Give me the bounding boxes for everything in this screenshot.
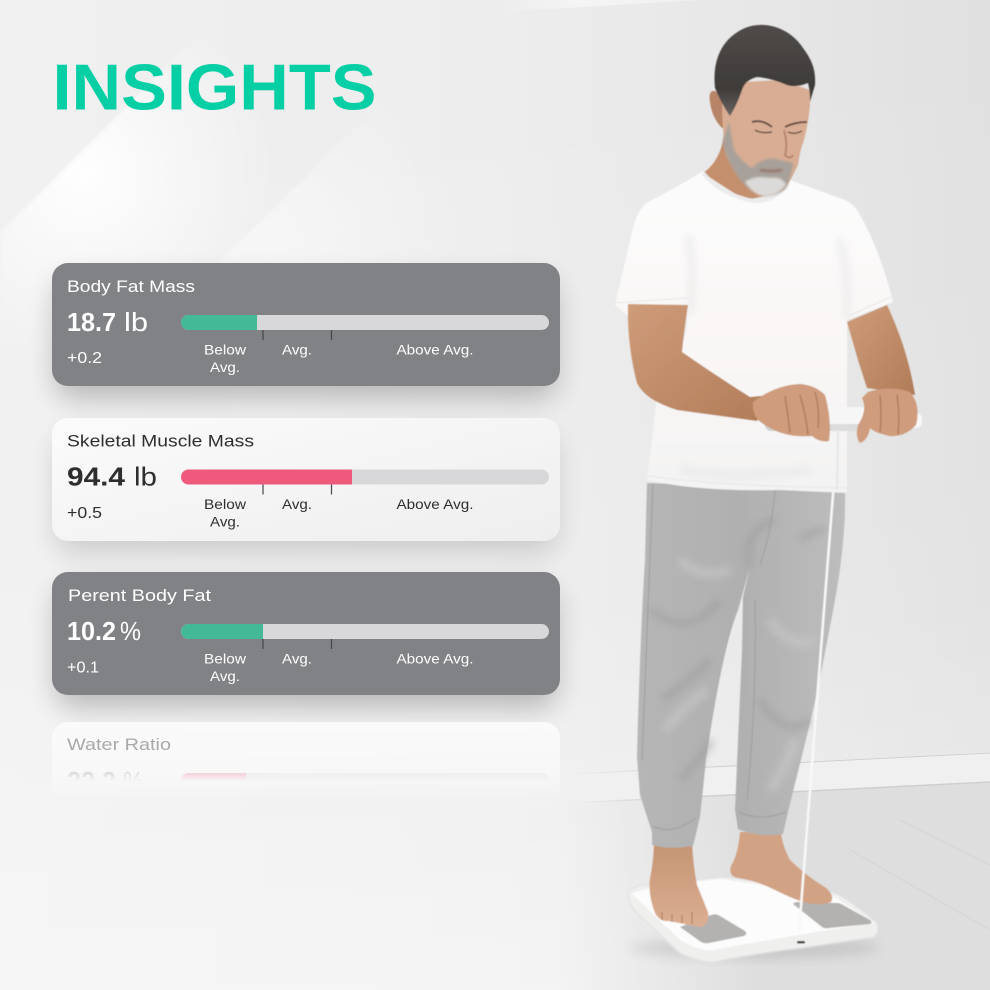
trousers — [637, 483, 845, 848]
panel: body fat mass: Avg. — [210, 360, 240, 375]
panel: percent body fat: % — [120, 616, 141, 646]
panel: skeletal muscle mass — [52, 418, 560, 553]
panel: skeletal muscle mass: Skeletal Muscle Mass — [67, 432, 254, 450]
panel: percent body fat: Avg. — [210, 669, 240, 684]
arm: viewer's right — [847, 305, 915, 395]
neck — [703, 135, 792, 200]
panel: percent body fat — [52, 572, 560, 707]
panel: water ratio (fading out): % — [123, 766, 144, 796]
panel: skeletal muscle mass: Avg. — [282, 497, 312, 512]
t-shirt — [615, 171, 893, 493]
hair — [714, 25, 815, 116]
panel: skeletal muscle mass: Above Avg. — [396, 497, 474, 512]
photo: man standing on a smart scale — [615, 25, 922, 962]
title: INSIGHTS — [52, 50, 376, 124]
panel: skeletal muscle mass: Avg. — [210, 514, 240, 530]
panel: water ratio (fading out): 22.2 — [67, 766, 116, 796]
panel: body fat mass: Body Fat Mass — [67, 278, 195, 296]
panel: body fat mass: Above Avg. — [396, 342, 474, 358]
face — [722, 80, 810, 195]
panel: percent body fat: Perent Body Fat — [68, 587, 211, 605]
panel: percent body fat: Below — [204, 652, 246, 666]
head — [710, 25, 815, 196]
panel: skeletal muscle mass: 94.4 — [67, 462, 126, 492]
arm: viewer's left — [628, 304, 770, 421]
panel: body fat mass: Avg. — [282, 342, 312, 358]
floor and skirting board — [560, 752, 990, 990]
panel: water ratio (fading out) — [56, 722, 560, 778]
panel: percent body fat: 10.2 — [67, 616, 116, 646]
panel: body fat mass: +0.2 — [67, 350, 102, 367]
panel: body fat mass: lb — [124, 307, 148, 337]
electrode pads — [680, 902, 872, 943]
beard — [723, 122, 793, 196]
panel: body fat mass: Below — [204, 342, 246, 358]
panel: percent body fat: Avg. — [282, 652, 312, 666]
panel: body fat mass — [52, 263, 560, 398]
panel: percent body fat: Above Avg. — [396, 652, 474, 666]
ear — [710, 91, 730, 128]
panel: body fat mass: 18.7 — [67, 307, 116, 337]
cable — [799, 430, 838, 932]
scale — [628, 877, 880, 962]
panel: water ratio (fading out): Water Ratio — [67, 736, 171, 754]
panel: percent body fat: +0.1 — [67, 660, 99, 676]
panel: skeletal muscle mass: lb — [134, 462, 157, 492]
grip handle — [765, 407, 922, 431]
panel: skeletal muscle mass: Below — [204, 497, 246, 512]
cable from handle — [837, 430, 838, 490]
panel: skeletal muscle mass: +0.5 — [67, 505, 102, 522]
feet — [650, 832, 832, 927]
hands — [753, 384, 918, 443]
